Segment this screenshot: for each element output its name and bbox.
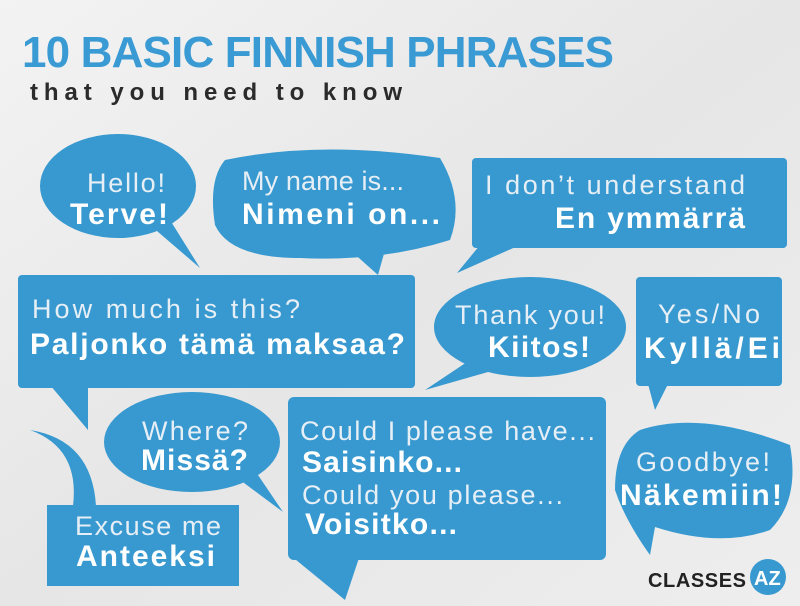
bubble: yes/no bbox=[636, 277, 782, 410]
bubble: where: Where? bbox=[142, 416, 248, 446]
bubble: goodbye: Näkemiin! bbox=[620, 479, 782, 512]
logo: AZ bbox=[754, 568, 781, 590]
bubble: where: Missä? bbox=[141, 444, 248, 477]
bubble: my name bbox=[213, 149, 456, 275]
bubble: I don't understand: I don’t understand bbox=[485, 170, 745, 200]
logo bbox=[648, 559, 786, 595]
bubble: hello bbox=[40, 134, 200, 268]
bubble: excuse me: Excuse me bbox=[75, 511, 221, 541]
bubble: thank you bbox=[425, 277, 626, 390]
bubble: thank you: Thank you! bbox=[455, 300, 605, 330]
bubble: excuse me: Anteeksi bbox=[76, 540, 215, 573]
bubble: goodbye: Goodbye! bbox=[636, 447, 770, 477]
bubble: could I bbox=[288, 397, 606, 600]
bubble: my name: My name is... bbox=[242, 166, 404, 196]
logo: CLASSES bbox=[648, 570, 746, 592]
bubble: how much: Paljonko tämä maksaa? bbox=[30, 328, 405, 361]
subtitle: that you need to know bbox=[30, 79, 402, 106]
bubble: could I: Saisinko... bbox=[302, 446, 462, 479]
bubble: I don't understand bbox=[457, 158, 787, 273]
bubble: how much bbox=[18, 275, 415, 430]
bubble: could I: Could you please... bbox=[302, 480, 563, 510]
bubble: yes/no: Yes/No bbox=[658, 299, 760, 329]
bubble: my name: Nimeni on... bbox=[242, 198, 440, 231]
bubble: could I: Could I please have... bbox=[300, 416, 595, 446]
bubble: I don't understand: En ymmärrä bbox=[555, 202, 745, 235]
bubble: where bbox=[104, 392, 283, 512]
bubble: hello: Hello! bbox=[87, 168, 165, 198]
bubble: excuse me bbox=[30, 430, 239, 586]
title: 10 BASIC FINNISH PHRASES bbox=[22, 28, 614, 77]
bubble: thank you: Kiitos! bbox=[488, 331, 590, 364]
bubble: could I: Voisitko... bbox=[305, 508, 457, 541]
bubble: goodbye bbox=[615, 423, 792, 555]
bubble: how much: How much is this? bbox=[32, 294, 300, 324]
bubble: yes/no: Kyllä/Ei bbox=[644, 332, 780, 365]
bubble: hello: Terve! bbox=[70, 198, 168, 231]
